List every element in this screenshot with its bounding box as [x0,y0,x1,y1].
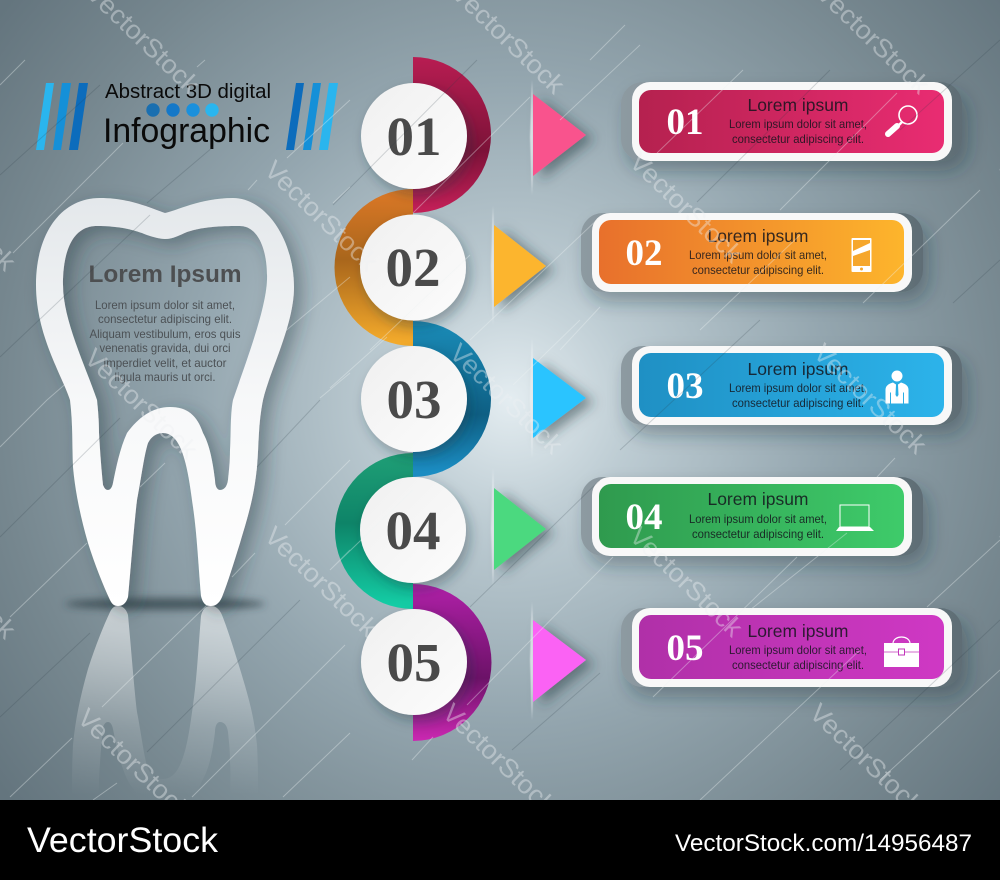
number circle 04 [360,477,466,583]
tooth text block: venenatis gravida, dui orci [100,341,230,355]
tooth text block: Lorem ipsum dolor sit amet, [95,298,235,312]
icon: briefcase [884,637,919,667]
card 01: 01 [666,102,704,143]
step 4 band [335,453,413,609]
number circle 01: 01 [386,106,442,167]
card 02: consectetur adipiscing elit. [692,263,824,277]
watermarks: VectorStock [804,697,930,820]
card 05: consectetur adipiscing elit. [732,658,864,672]
card 01 [621,82,962,161]
card 03 [621,346,962,425]
number circle 02: 02 [386,237,440,298]
tooth text block: ligula mauris ut orci. [114,370,216,384]
number circle 01 [361,83,467,189]
card 05: 05 [666,628,704,669]
icon: person [886,370,908,404]
watermarks: VectorStock [808,337,934,460]
arrow 04 [491,468,546,586]
number circle 05 [361,609,467,715]
card 01: consectetur adipiscing elit. [732,132,864,146]
watermarks: VectorStock [624,146,750,269]
number circle 03 [361,346,467,452]
watermarks: VectorStock [624,520,750,643]
footer image id: VectorStock.com/14956487 [675,830,972,857]
card 05: Lorem ipsum [748,621,848,641]
watermarks: VectorStock [437,697,563,820]
number circle 04: 04 [386,500,440,561]
number circle 02 [360,214,466,320]
card 02: Lorem ipsum [708,226,808,246]
card 04: 04 [626,497,662,538]
card 03: consectetur adipiscing elit. [732,396,864,410]
tooth text block [88,261,242,384]
header: abstract 3D digital infographic [36,80,338,150]
card 03: Lorem ipsum [748,359,848,379]
arrow 01 [530,80,586,195]
card 02 [581,213,923,292]
footer bar [0,800,1000,880]
card 02: Lorem ipsum dolor sit amet, [689,248,827,262]
step 3 band [413,321,491,477]
left stripes [36,83,88,150]
watermarks: VectorStock [79,342,205,465]
dots [146,103,219,117]
watermarks: VectorStock [259,520,385,643]
card 03: Lorem ipsum dolor sit amet, [729,381,867,395]
card 04: consectetur adipiscing elit. [692,527,824,541]
tooth text block: consectetur adipiscing elit. [98,312,232,326]
card 05 [621,608,962,687]
ground shadow under tooth [65,598,265,610]
number circle 05: 05 [386,632,442,693]
watermarks: VectorStock [444,337,570,460]
step 2 band [334,189,413,346]
watermarks: VectorStock [72,702,198,825]
icon: phone [852,238,872,272]
right stripes [286,83,338,150]
number circle 03: 03 [386,369,442,430]
step 5 band [413,584,492,741]
title: Infographic [103,112,270,150]
card 03: 03 [666,366,704,407]
tooth text block: imperdiet velit, et auctor [104,356,227,370]
icon: laptop [836,505,874,531]
card 02: 02 [626,233,662,274]
card 04: Lorem ipsum dolor sit amet, [689,512,827,526]
card 05: Lorem ipsum dolor sit amet, [729,643,867,657]
subtitle: Abstract 3D digital [105,80,271,103]
tooth outline [36,198,294,606]
tooth heading: Lorem Ipsum [88,261,242,288]
card 04 [581,477,923,556]
card 01: Lorem ipsum dolor sit amet, [729,117,867,131]
tooth text block: Aliquam vestibulum, eros quis [90,327,240,341]
footer brand: VectorStock [27,821,219,860]
arrow 05 [530,602,586,720]
watermarks: VectorStock [259,154,385,277]
tooth reflection [72,606,258,795]
card 01: Lorem ipsum [748,95,848,115]
icon: magnifier [888,106,917,134]
arrow 03 [530,338,586,458]
card 04: Lorem ipsum [708,489,808,509]
arrow 02 [491,206,546,325]
step 1 band [413,57,491,213]
